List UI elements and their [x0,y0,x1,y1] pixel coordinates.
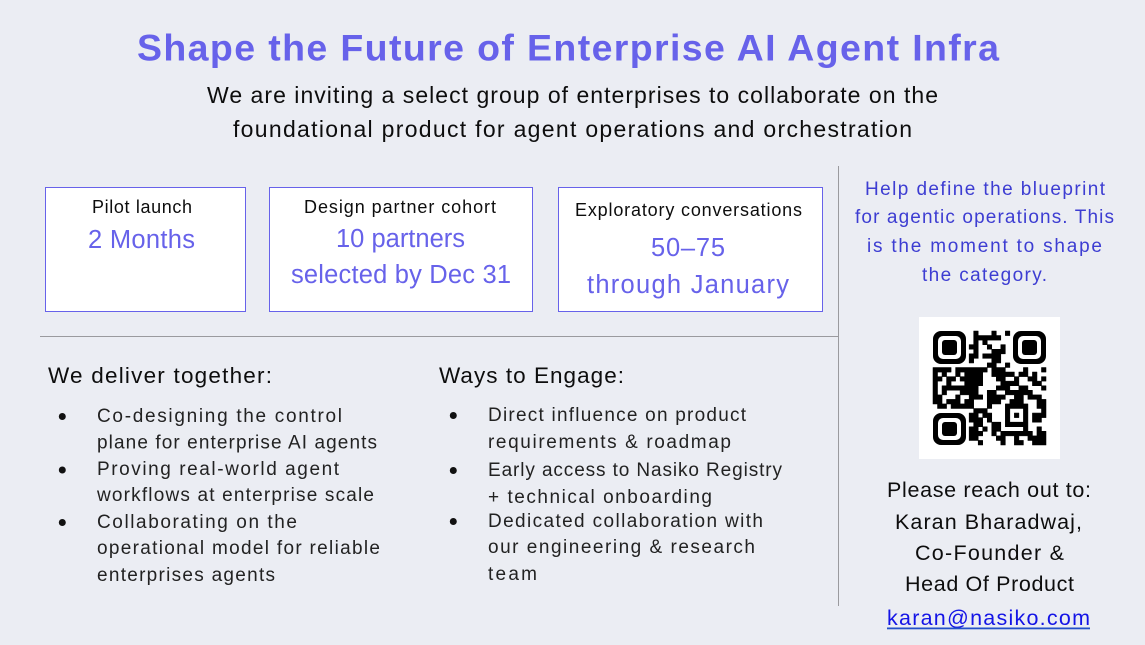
panel: pilot launch: Pilot launch [92,197,192,217]
callout: blueprint message: for agentic operations. This [855,207,1114,228]
list: we deliver together: operational model for reliable [97,538,380,559]
list: ways to engage [450,405,782,585]
list: we deliver together: plane for enterprise AI agents [97,432,377,454]
panel: design partner cohort: selected by Dec 31 [291,261,511,289]
heading: ways to engage: Ways to Engage: [439,363,624,388]
list: ways to engage: Early access to Nasiko Registry [488,460,782,481]
panel: exploratory conversations [558,188,822,312]
panel: design partner cohort [270,188,532,312]
list: ways to engage: team [488,564,537,585]
panel: design partner cohort: Design partner cohort [304,197,496,217]
contact details: karan@nasiko.com [887,606,1090,630]
callout: blueprint message: the category. [922,265,1047,286]
callout: blueprint message [855,179,1114,286]
icon: QR code [919,317,1060,459]
heading: we deliver together: We deliver together: [48,363,272,388]
contact details: Co-Founder & [915,541,1064,565]
list: ways to engage: our engineering & research [488,537,755,558]
list: we deliver together: enterprises agents [97,565,275,586]
contact details: Karan Bharadwaj, [895,510,1082,534]
list: we deliver together [59,406,380,586]
title: Shape the Future of Enterprise AI Agent Infra [137,26,1000,68]
list: ways to engage: requirements & roadmap [488,432,731,453]
subtitle [207,82,938,142]
panel: exploratory conversations: 50–75 [651,234,725,262]
list: we deliver together: Collaborating on the [97,512,297,533]
contact details [887,478,1091,630]
panel: exploratory conversations: Exploratory conversations [575,200,802,220]
list: we deliver together: Proving real-world agent [97,459,340,480]
list: ways to engage: Direct influence on product [488,405,747,426]
list: we deliver together: workflows at enterprise scale [96,485,374,506]
panel: design partner cohort: 10 partners [336,225,465,253]
list: ways to engage: + technical onboarding [488,487,712,508]
subtitle: We are inviting a select group of enterprises to collaborate on the [207,82,938,108]
panel: pilot launch: 2 Months [88,226,195,254]
callout: blueprint message: is the moment to shape [867,236,1102,257]
panel: exploratory conversations: through January [587,271,789,299]
list: we deliver together: Co-designing the control [97,406,342,427]
list: ways to engage: Dedicated collaboration with [488,511,763,532]
contact details: Please reach out to: [887,478,1091,502]
contact details: Head Of Product [905,572,1074,596]
panel: pilot launch [46,188,246,312]
subtitle: foundational product for agent operations and orchestration [233,116,912,142]
callout: blueprint message: Help define the blueprint [865,179,1106,200]
